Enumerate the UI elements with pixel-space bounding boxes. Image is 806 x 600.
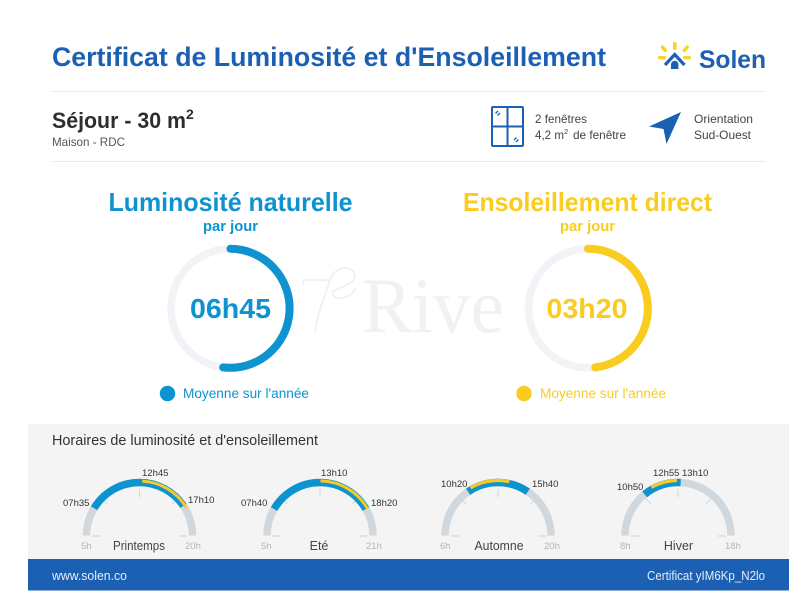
- gauge: Hiver: 10h50: [617, 482, 643, 493]
- panel heading: Horaires de luminosité et d'ensoleillement: [52, 432, 319, 449]
- gauge: Printemps: 17h10: [188, 495, 214, 506]
- gauge: Hiver: 12h55: [653, 468, 679, 479]
- gauge: Eté: 13h10: [321, 468, 347, 479]
- window details: 2 fenêtres: [535, 112, 587, 126]
- watermark: Rive: [362, 262, 504, 349]
- icon: window: [492, 107, 523, 146]
- gauge: Hiver: [617, 468, 741, 553]
- gauge: Hiver: Hiver: [664, 539, 693, 553]
- room subheading: Maison - RDC: [52, 135, 125, 149]
- gauge: Printemps: 07h35: [63, 498, 89, 509]
- gauge: Printemps: Printemps: [113, 539, 165, 553]
- gauge: Hiver: 18h: [725, 541, 741, 552]
- subheading: direct sunlight: par jour: [560, 218, 615, 235]
- logo: Solen: [658, 42, 766, 74]
- gauge: Eté: 07h40: [241, 498, 267, 509]
- gauge: Printemps: 12h45: [142, 468, 168, 479]
- title: Certificat de Luminosité et d'Ensoleillement: [52, 42, 606, 72]
- gauge: Hiver: 8h: [620, 541, 631, 552]
- panel: schedules: [28, 424, 789, 560]
- footer certificate id: Certificat yIM6Kp_N2lo: [647, 569, 765, 583]
- gauge: Hiver: 13h10: [682, 468, 708, 479]
- gauge: Automne: Automne: [474, 539, 524, 553]
- orientation details: Sud-Ouest: [694, 128, 752, 142]
- footer bar: [28, 559, 789, 590]
- room heading: Séjour - 30 m: [52, 108, 186, 133]
- gauge: Automne: 15h40: [532, 479, 558, 490]
- window details: 4,2 m: [535, 128, 564, 142]
- legend: natural light: Moyenne sur l'année: [183, 385, 309, 401]
- icon: sun and house: [658, 42, 691, 69]
- gauge: Automne: 10h20: [441, 479, 467, 490]
- gauge: Automne: 6h: [440, 541, 451, 552]
- heading: direct sunlight: Ensoleillement direct: [463, 187, 712, 217]
- footer website: www.solen.co: [51, 569, 127, 583]
- gauge: Printemps: 20h: [185, 541, 201, 552]
- gauge: Eté: 18h20: [371, 498, 397, 509]
- ring chart: natural light: 06h45: [190, 293, 271, 324]
- ring chart: natural light: [171, 249, 290, 368]
- orientation details: [694, 112, 753, 142]
- gauge: Eté: 5h: [261, 541, 272, 552]
- window details: de fenêtre: [573, 128, 626, 142]
- watermark: [304, 262, 504, 349]
- orientation details: Orientation: [694, 112, 753, 126]
- gauge: Eté: Eté: [310, 539, 328, 553]
- gauge: Automne: [440, 479, 560, 553]
- gauge: Printemps: 5h: [81, 541, 92, 552]
- legend: direct sunlight: Moyenne sur l'année: [540, 385, 666, 401]
- subheading: natural light: par jour: [203, 218, 258, 235]
- room heading: 2: [186, 106, 194, 122]
- logo wordmark: Solen: [699, 46, 766, 74]
- icon: orientation arrow: [649, 112, 681, 144]
- ring chart: direct sunlight: 03h20: [546, 293, 628, 324]
- ring chart: direct sunlight: [528, 249, 648, 368]
- window details: 2: [564, 127, 568, 136]
- gauge: Automne: 20h: [544, 541, 560, 552]
- gauge: Eté: 21h: [366, 541, 382, 552]
- gauge: Printemps: [63, 468, 214, 553]
- gauge: Eté: [241, 468, 397, 553]
- window details: [535, 112, 626, 142]
- heading: natural light: Luminosité naturelle: [108, 187, 352, 217]
